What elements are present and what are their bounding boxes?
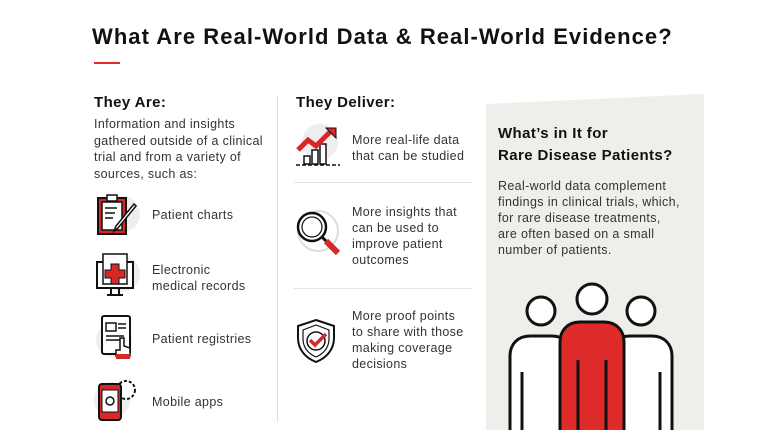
item: proof points — [297, 309, 464, 371]
text: improve patient — [352, 237, 443, 251]
title underline — [94, 62, 120, 64]
text — [352, 205, 457, 267]
item: more insights — [296, 205, 457, 267]
separator — [294, 288, 472, 289]
icon: tablet with hand — [96, 315, 132, 359]
icon: shield check — [297, 319, 335, 364]
item: more data — [296, 124, 464, 166]
heading — [498, 125, 673, 164]
heading: What’s in It for — [498, 125, 608, 142]
icon: monitor with cross — [96, 253, 140, 296]
label — [152, 263, 245, 293]
label: Patient registries — [152, 332, 251, 346]
intro text: sources, such as: — [94, 166, 197, 180]
item: patient charts — [97, 194, 233, 235]
icon: clipboard — [97, 194, 140, 235]
text: outcomes — [352, 253, 409, 267]
body text: are often based on a small — [498, 227, 654, 241]
panel: they are — [94, 94, 263, 421]
item: electronic medical records — [96, 253, 245, 296]
text: making coverage — [352, 341, 452, 355]
panel: they deliver — [294, 94, 472, 371]
separator — [294, 182, 472, 183]
icon: magnifier — [296, 210, 340, 256]
body text: findings in clinical trials, which, — [498, 195, 680, 209]
icon: three people — [508, 282, 674, 430]
text: can be used to — [352, 221, 439, 235]
text — [352, 133, 464, 163]
heading: Rare Disease Patients? — [498, 147, 673, 164]
label: Patient charts — [152, 208, 233, 222]
icon: phone with gears — [94, 380, 136, 421]
heading: they deliver: They Deliver: — [296, 94, 395, 111]
text: decisions — [352, 357, 407, 371]
body text: for rare disease treatments, — [498, 211, 661, 225]
item: mobile apps — [94, 380, 223, 421]
intro text: gathered outside of a clinical — [94, 134, 263, 148]
heading: they are: They Are: — [94, 94, 166, 111]
intro text — [94, 117, 263, 180]
panel background — [486, 94, 704, 430]
intro text: trial and from a variety of — [94, 150, 241, 164]
text: More real-life data — [352, 133, 459, 147]
panel: rare disease patients — [486, 94, 704, 430]
text: More insights that — [352, 205, 457, 219]
body text: Real-world data complement — [498, 179, 666, 193]
text: to share with those — [352, 325, 464, 339]
label: Mobile apps — [152, 395, 223, 409]
body text — [498, 179, 680, 257]
icon: chart arrow — [296, 124, 340, 166]
text: that can be studied — [352, 149, 464, 163]
item: patient registries — [96, 315, 251, 359]
text: More proof points — [352, 309, 455, 323]
label: Electronic — [152, 263, 210, 277]
divider — [277, 96, 278, 422]
title: What Are Real-World Data & Real-World Evidence? — [92, 24, 673, 49]
text — [352, 309, 464, 371]
body text: number of patients. — [498, 243, 612, 257]
intro text: Information and insights — [94, 117, 235, 131]
label: medical records — [152, 279, 245, 293]
